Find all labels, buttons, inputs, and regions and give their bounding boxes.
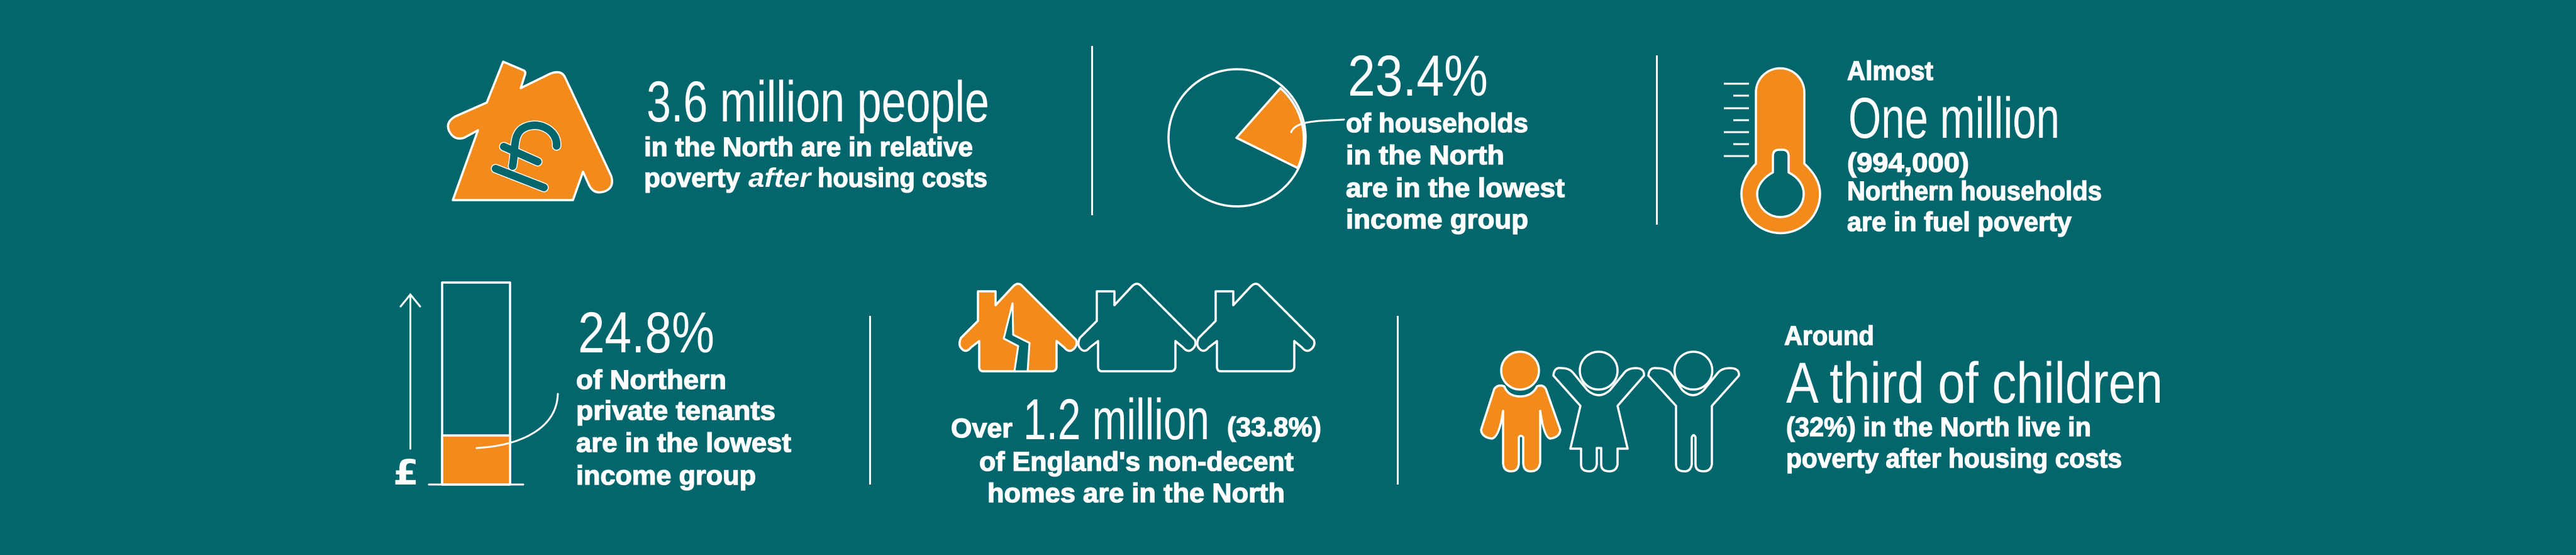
- chart: income bar: [393, 283, 558, 493]
- text: poverty after housing costs: [644, 163, 987, 193]
- headline row: Over 1.2 million (33.8%): 1.2 million: [1023, 388, 1209, 452]
- text: in the North are in relative: in the North are in relative: [644, 132, 973, 162]
- panel: 3.6 million people: [448, 62, 989, 200]
- panel: 1.2 million non-decent homes: [951, 284, 1321, 508]
- text: Around: Around: [1784, 321, 1874, 351]
- icon: three houses, one cracked: [960, 284, 1314, 371]
- text: Almost: Almost: [1847, 56, 1933, 86]
- text: of Northern private tenants are in the lowest income group: [576, 365, 791, 491]
- text: (32%) in the North live in poverty after housing costs: poverty after housing costs: [1786, 444, 2122, 474]
- text: poverty after housing costs: housing costs: [818, 163, 987, 193]
- text: of Northern private tenants are in the lowest income group: private tenants: [576, 396, 775, 426]
- text: of households in the North are in the lowest income group: in the North: [1346, 140, 1504, 171]
- text: (994,000) Northern households are in fuel poverty: (994,000): [1847, 148, 1969, 178]
- text: of Northern private tenants are in the lowest income group: of Northern: [576, 365, 726, 395]
- headline: One million: One million: [1848, 86, 2060, 150]
- headline row: Over 1.2 million (33.8%): (33.8%): [1227, 412, 1321, 442]
- text: of households in the North are in the lowest income group: [1346, 108, 1565, 235]
- headline: 24.8%: 24.8%: [578, 301, 714, 365]
- headline: A third of children: A third of children: [1786, 351, 2163, 415]
- text: poverty after housing costs: after: [748, 163, 812, 193]
- headline: 23.4%: 23.4%: [1348, 44, 1488, 108]
- panel: 23.4% of households: [1169, 44, 1565, 235]
- text: poverty after housing costs: poverty: [644, 163, 740, 193]
- text: of England's non-decent homes are in the North: homes are in the North: [987, 478, 1285, 508]
- text: of England's non-decent homes are in the North: of England's non-decent: [979, 447, 1294, 477]
- panel: one million fuel poverty: [1724, 56, 2102, 237]
- text: (994,000) Northern households are in fuel poverty: are in fuel poverty: [1847, 207, 2072, 237]
- headline: 3.6 million people: 3.6 million people: [647, 70, 989, 134]
- text: (994,000) Northern households are in fuel poverty: Northern households: [1847, 176, 2102, 206]
- text: of households in the North are in the lowest income group: income group: [1346, 205, 1528, 235]
- text: (32%) in the North live in poverty after housing costs: [1786, 412, 2122, 474]
- chart: pie with orange wedge: [1169, 69, 1344, 206]
- icon: thermometer: [1724, 68, 1820, 233]
- text: (32%) in the North live in poverty after housing costs: (32%) in the North live in: [1786, 412, 2091, 442]
- text: of households in the North are in the lowest income group: are in the lowest: [1346, 173, 1565, 203]
- panel: a third of children: [1481, 321, 2163, 474]
- icon: house with pound sign: [448, 62, 612, 200]
- text: of households in the North are in the lowest income group: of households: [1346, 108, 1528, 138]
- chart: income bar: £: [393, 452, 419, 493]
- text: of Northern private tenants are in the lowest income group: are in the lowest: [576, 428, 791, 458]
- panel: 24.8% private tenants: [393, 283, 791, 493]
- icon: three children, one orange: [1481, 352, 1739, 471]
- headline row: Over 1.2 million (33.8%): Over: [951, 413, 1013, 444]
- text: of England's non-decent homes are in the North: [979, 447, 1294, 508]
- text: of Northern private tenants are in the lowest income group: income group: [576, 461, 756, 491]
- text: (994,000) Northern households are in fuel poverty: [1847, 148, 2102, 237]
